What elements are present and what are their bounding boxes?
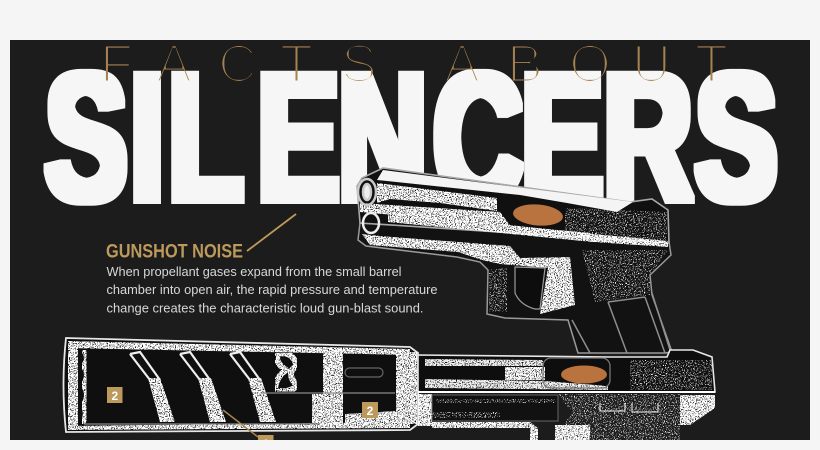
frame edge stipple <box>418 394 715 440</box>
bullet in chamber <box>561 366 607 384</box>
body text: chamber into open air, the rapid pressure and temperature <box>106 282 438 297</box>
stipple: slide lower <box>360 203 590 236</box>
inner tube <box>345 368 383 377</box>
forward squiggle baffle <box>275 353 297 391</box>
baffle stack rings <box>312 350 417 425</box>
illustration: suppressed pistol cutaway <box>64 338 715 440</box>
body text: change creates the characteristic loud gun-blast sound. <box>106 300 424 316</box>
slide top white band <box>377 170 633 212</box>
pistol frame and grip <box>358 223 672 353</box>
body text <box>106 264 438 316</box>
internal line <box>84 393 395 424</box>
baffles upper <box>130 352 260 380</box>
bullet in chamber <box>513 204 563 226</box>
magazine lines <box>572 293 670 353</box>
badge: 1 <box>258 435 274 450</box>
slide stripes <box>425 359 608 390</box>
connector line <box>247 214 296 251</box>
slide second band <box>377 183 497 211</box>
rear wave baffle <box>82 350 86 424</box>
frame stipple <box>555 394 680 440</box>
badge: 2 near expansion chamber: 2 <box>367 404 374 418</box>
stipple: grip front and rear <box>489 250 668 312</box>
title: SILENCERS: SILENCERS <box>45 35 778 239</box>
leader line to badge <box>223 410 258 437</box>
muzzle rings <box>358 179 379 233</box>
barrel stripe <box>388 212 668 247</box>
pistol slide body <box>418 350 715 392</box>
section heading: gunshot noise: GUNSHOT NOISE <box>106 242 243 262</box>
illustration: pistol cutaway <box>357 168 672 353</box>
body text: When propellant gases expand from the small barrel <box>106 264 402 279</box>
baffles lower <box>148 378 276 422</box>
stipple: rear slide serrations <box>565 208 667 241</box>
suppressor wall stipple <box>68 341 410 430</box>
suppressor body <box>64 338 418 432</box>
chamber outline <box>543 358 610 388</box>
frame stripe <box>418 391 715 393</box>
rail stipple <box>430 399 556 418</box>
frame rail box <box>432 395 558 421</box>
heading: FACTS ABOUT: FACTS ABOUT <box>100 34 728 94</box>
badge: 2 on suppressor: 2 <box>111 389 118 403</box>
serrations <box>630 360 712 390</box>
bore stipple <box>505 367 545 380</box>
pistol slide <box>357 168 669 243</box>
badge: 2 near expansion chamber <box>362 402 378 418</box>
trigger guard opening <box>515 267 545 309</box>
badge: 2 on suppressor <box>107 387 122 403</box>
frame lugs <box>600 403 658 412</box>
stipple: frame underside <box>362 234 575 314</box>
